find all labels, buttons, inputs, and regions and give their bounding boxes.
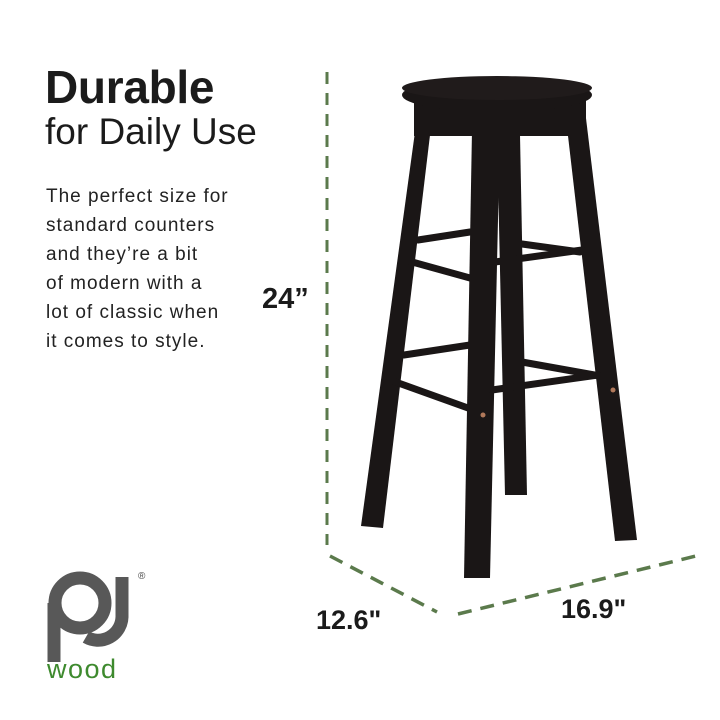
title: for Daily Use [45, 111, 257, 152]
logo: pj wood [46, 571, 146, 684]
stool [361, 76, 637, 578]
logo: pj wood: wood [46, 654, 118, 684]
description text [46, 186, 229, 352]
description text: The perfect size for [46, 186, 229, 207]
description text: lot of classic when [46, 302, 219, 323]
description text: it comes to style. [46, 331, 206, 352]
description text: of modern with a [46, 273, 202, 294]
dashed depth line [330, 556, 437, 612]
logo: pj wood: ® [138, 571, 146, 582]
title [45, 61, 257, 152]
label: depth 12.6": 12.6" [316, 605, 381, 635]
dashed height line [326, 72, 328, 545]
title: Durable [45, 61, 214, 113]
description text: and they’re a bit [46, 244, 198, 265]
label: height 24": 24” [262, 283, 309, 315]
description text: standard counters [46, 215, 215, 236]
dashed width line [458, 556, 696, 614]
label: width 16.9": 16.9" [561, 594, 626, 624]
